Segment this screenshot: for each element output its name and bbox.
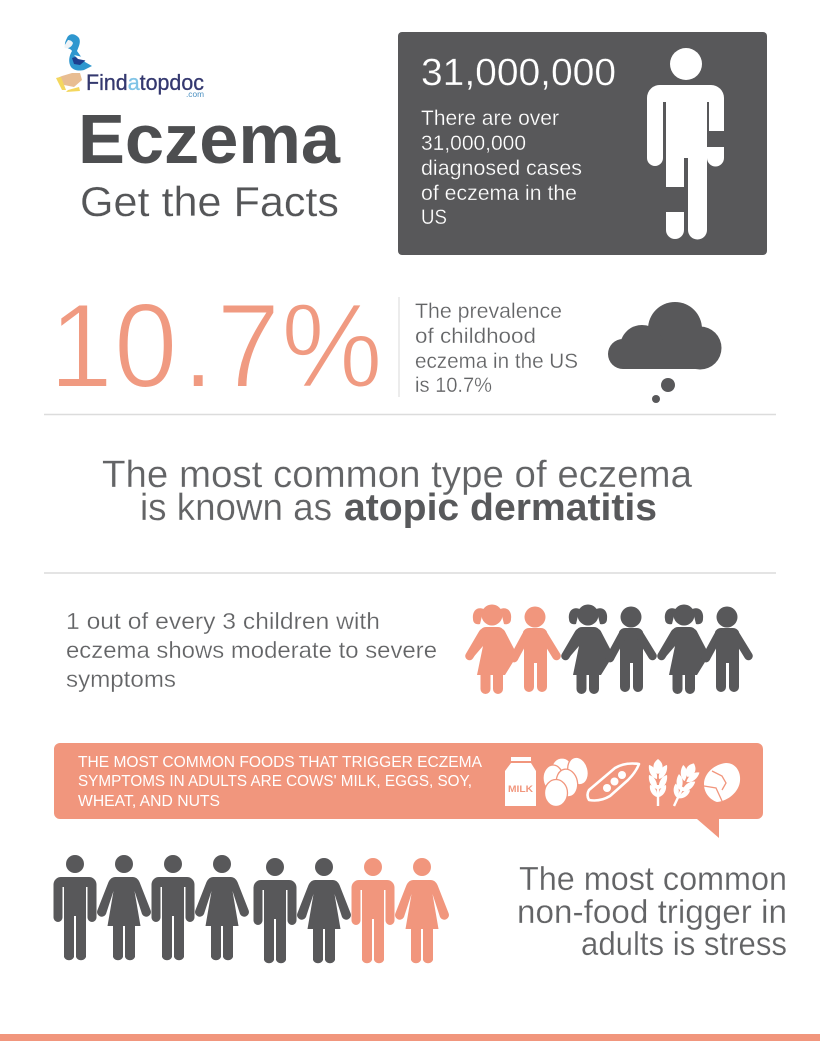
panel: 31,000,000 diagnosed cases [398, 32, 767, 255]
subtitle: Get the Facts [80, 178, 339, 225]
callout text: THE MOST COMMON FOODS THAT TRIGGER ECZEMA [78, 754, 482, 771]
panel description [421, 107, 582, 229]
footer bar [0, 1034, 820, 1041]
pictogram: children holding hands [470, 604, 748, 694]
panel description: There are over [421, 107, 559, 130]
text: childhood prevalence: The prevalence [415, 300, 562, 323]
text: stress trigger: non-food trigger in [517, 893, 787, 930]
text: stress trigger: adults is stress [581, 925, 787, 962]
icon: wheat ears [649, 759, 702, 810]
icon: eggs [543, 755, 591, 806]
icon: thought cloud [608, 302, 722, 403]
text: childhood prevalence [415, 300, 578, 397]
panel description: 31,000,000 [421, 132, 526, 155]
text: 1 out of 3 children: symptoms [66, 666, 176, 692]
panel description: diagnosed cases [421, 157, 582, 180]
pictogram: eight adults [54, 855, 449, 963]
heading: atopic dermatitis: atopic dermatitis [344, 487, 657, 529]
panel description: US [421, 206, 447, 229]
dark pair [662, 604, 748, 694]
text: childhood prevalence: eczema in the US [415, 350, 578, 373]
heading: atopic dermatitis [102, 454, 693, 529]
callout text: SYMPTOMS IN ADULTS ARE COWS' MILK, EGGS, SOY, [78, 773, 472, 790]
logo domain: .com [186, 90, 204, 99]
icon: nut [704, 763, 740, 802]
title: Eczema [78, 100, 341, 178]
text: stress trigger [517, 860, 787, 962]
icon: duck mascot [56, 34, 92, 92]
dark pair [566, 604, 652, 694]
heading: atopic dermatitis: The most common type of eczema [102, 454, 693, 496]
icon: person with affected patches [647, 48, 724, 240]
panel description: of eczema in the [421, 182, 577, 205]
text: stress trigger: The most common [519, 860, 787, 897]
logo wordmark: Findatopdoc [86, 70, 204, 95]
icon: milk carton: MILK [508, 784, 534, 794]
callout: food triggers [54, 743, 763, 838]
text: childhood prevalence: is 10.7% [415, 374, 492, 397]
text: 1 out of 3 children: eczema shows moderate to severe [66, 637, 437, 663]
highlighted pair [470, 604, 556, 694]
big number: 31,000,000 [421, 52, 616, 94]
text: 1 out of 3 children: 1 out of every 3 children with [66, 608, 380, 634]
callout text [78, 754, 482, 810]
heading: atopic dermatitis: is known as [140, 487, 332, 529]
text: childhood prevalence: of childhood [415, 325, 536, 348]
text: 1 out of 3 children [66, 608, 437, 692]
callout text: WHEAT, AND NUTS [78, 793, 220, 810]
logo: Findatopdoc [56, 34, 204, 99]
statistic: 10.7%: 10.7% [49, 278, 383, 413]
icon: milk carton [505, 757, 536, 806]
icon: soy pod [588, 764, 639, 800]
